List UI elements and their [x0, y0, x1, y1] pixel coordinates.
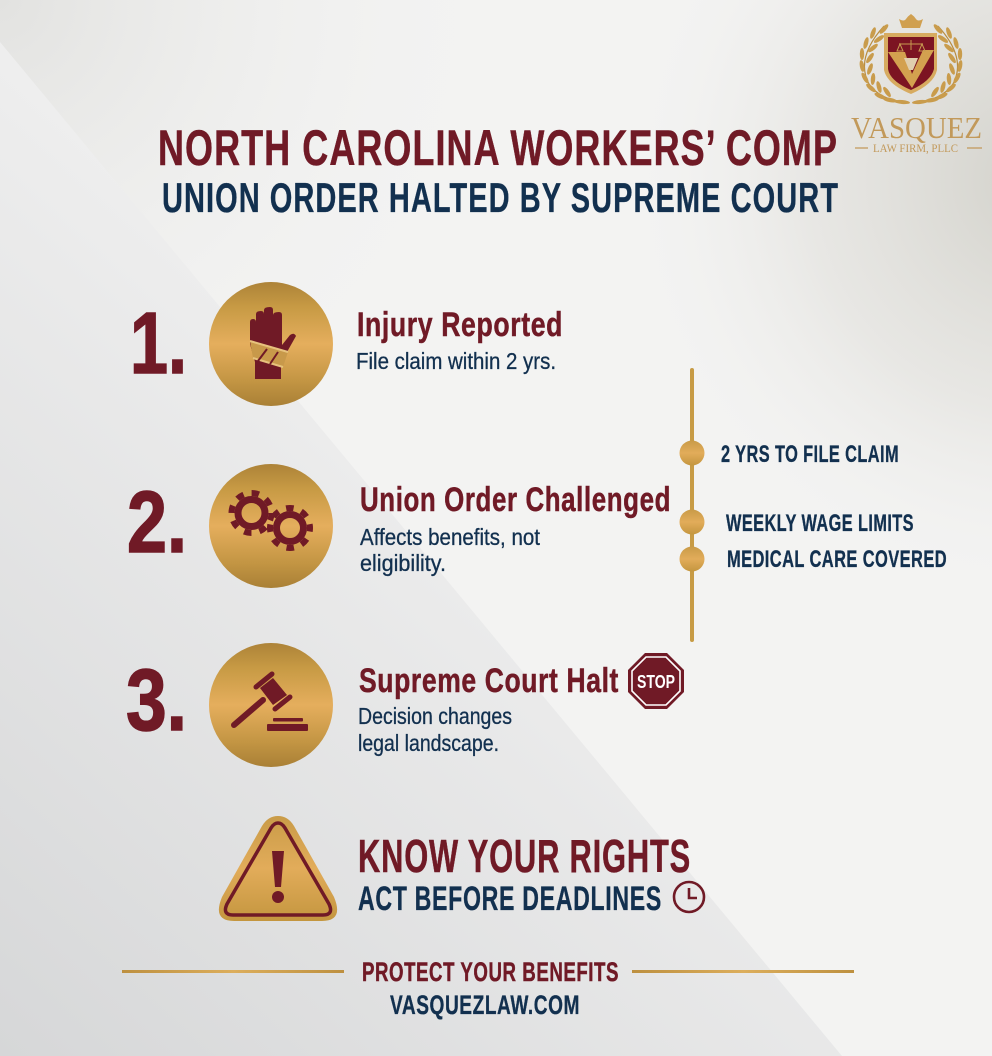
footer rule right — [632, 970, 854, 973]
icon: warning triangle — [219, 816, 337, 921]
step 2 description: eligibility. — [360, 550, 446, 576]
step 2 description: Affects benefits, not — [360, 524, 541, 550]
step 3 — [126, 643, 684, 767]
step 2 — [127, 464, 671, 588]
icon: gears — [232, 493, 310, 548]
footer rule left — [122, 970, 344, 973]
step 2 number: 2. — [127, 474, 187, 571]
timeline dot 3 — [680, 546, 704, 572]
step 2 gold circle — [209, 464, 333, 588]
timeline label 1: 2 YRS TO FILE CLAIM — [721, 441, 899, 468]
timeline dot 2 — [680, 510, 704, 534]
timeline dot 1 — [680, 440, 704, 466]
icon: bandaged hand — [250, 307, 296, 379]
icon: stop sign — [628, 653, 684, 709]
step 1 number: 1. — [130, 295, 187, 392]
timeline bar — [690, 368, 694, 642]
step 2 description — [360, 524, 541, 576]
step 3 description: Decision changes — [358, 703, 512, 729]
shield — [884, 33, 937, 94]
logo wordmark: VASQUEZ — [851, 110, 982, 145]
step 1 heading: Injury Reported — [357, 306, 563, 344]
laurel wreath — [859, 23, 963, 105]
scales and courthouse — [897, 40, 925, 51]
footer heading: PROTECT YOUR BENEFITS — [362, 957, 619, 987]
timeline — [680, 368, 947, 642]
icon: stop sign: STOP — [637, 672, 675, 692]
step 3 heading: Supreme Court Halt — [359, 662, 619, 700]
step 1 gold circle — [209, 282, 333, 406]
step 3 gold circle — [209, 643, 333, 767]
heading: know your rights: KNOW YOUR RIGHTS — [358, 830, 691, 882]
footer website: VASQUEZLAW.COM — [390, 990, 580, 1020]
title — [158, 120, 839, 221]
V emblem — [888, 50, 934, 88]
step 1 — [130, 282, 563, 406]
step 1 description: File claim within 2 yrs. — [356, 348, 556, 374]
crown — [899, 14, 923, 28]
subheading: act before deadlines: ACT BEFORE DEADLINES — [358, 880, 662, 918]
step 3 number: 3. — [126, 652, 187, 749]
icon: clock — [674, 882, 704, 912]
logo: Vasquez Law Firm — [851, 14, 982, 155]
step 2 heading: Union Order Challenged — [360, 481, 671, 519]
icon: gavel — [234, 674, 308, 731]
logo tagline: LAW FIRM, PLLC — [873, 143, 958, 155]
footer — [122, 957, 854, 1020]
step 3 description: legal landscape. — [358, 730, 499, 756]
call to action — [219, 816, 704, 921]
step 3 description — [358, 703, 512, 756]
